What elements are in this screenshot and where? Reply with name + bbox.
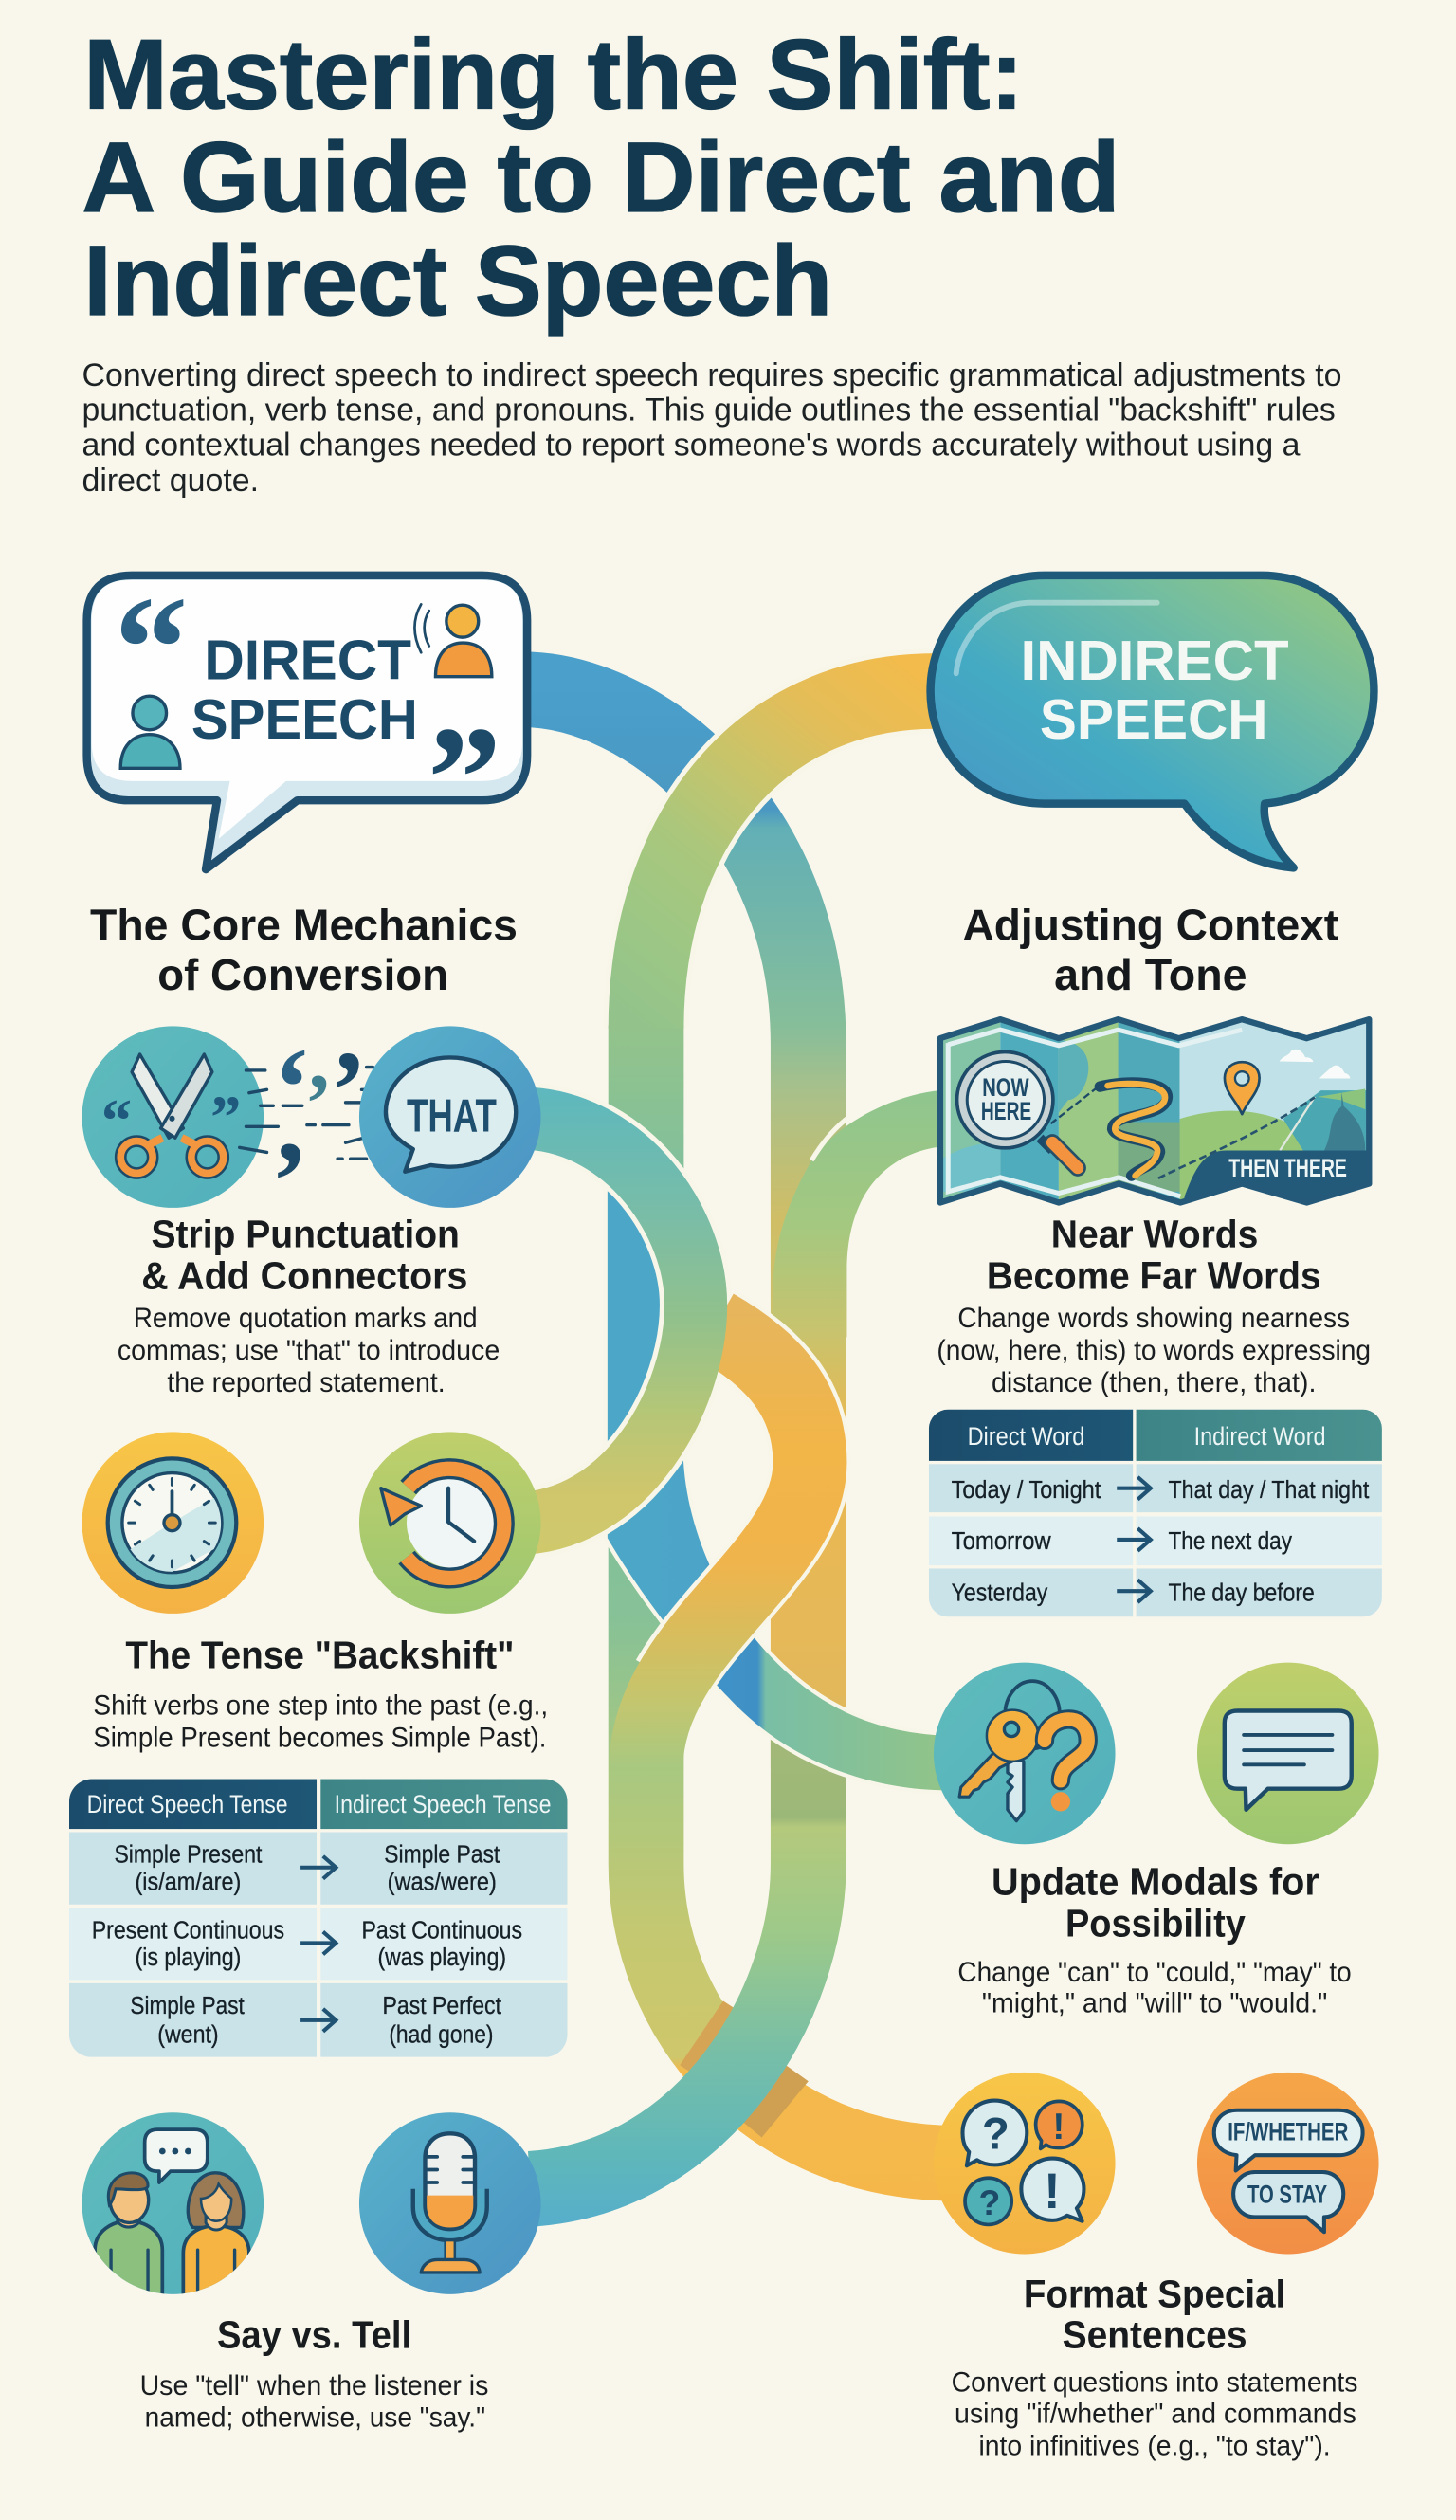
indirect label: SPEECH <box>1040 687 1268 751</box>
indirect label: INDIRECT <box>1021 629 1289 692</box>
section: strip punctuation: commas; use "that" to introduce <box>118 1335 500 1366</box>
table: tense changes: (is playing) <box>135 1943 241 1971</box>
heading: core mechanics: of Conversion <box>157 950 448 999</box>
section: strip punctuation: the reported statement. <box>167 1367 446 1398</box>
ribbon: keys circle to left lane <box>608 1181 948 1790</box>
table: tense changes: Simple Past <box>384 1840 500 1869</box>
section: tense backshift: The Tense "Backshift" <box>125 1634 515 1677</box>
table: direct and indirect words: The day before <box>1168 1578 1315 1606</box>
section: update modals: Update Modals for <box>992 1860 1320 1904</box>
icon: questions and exclamations <box>934 2073 1116 2254</box>
icon: flying punctuation: , <box>277 1060 304 1185</box>
table: direct and indirect words: Direct Word <box>968 1422 1084 1451</box>
ribbon: that circle to backshift circle <box>515 1119 696 1524</box>
direct speech bubble <box>87 566 527 869</box>
table: tense changes: (went) <box>157 2020 219 2049</box>
section: say vs tell <box>140 2313 488 2434</box>
indirect speech bubble <box>931 575 1374 867</box>
ribbon: direct bubble to right lane <box>522 689 809 1768</box>
map illustration: THEN THERE <box>1228 1154 1347 1182</box>
section: format special sentences: Format Special <box>1024 2272 1285 2315</box>
table: tense changes: Indirect Speech Tense <box>335 1790 552 1818</box>
icon: scissors cutting quotes <box>82 1026 264 1208</box>
section: strip punctuation: Remove quotation marks and <box>134 1303 478 1334</box>
section: format special sentences <box>952 2272 1357 2461</box>
section: near words: Near Words <box>1051 1212 1258 1255</box>
section: update modals: "might," and "will" to "would." <box>982 1987 1327 2018</box>
section: say vs tell: named; otherwise, use "say." <box>145 2402 485 2434</box>
icon: that bubble circle <box>359 1026 541 1208</box>
icon: orange speaker <box>414 604 492 677</box>
title: Indirect Speech <box>83 226 832 337</box>
ribbon: indirect bubble to left lane <box>646 691 956 2164</box>
table: tense changes <box>69 1780 568 2057</box>
section: near words: Change words showing nearness <box>957 1303 1350 1334</box>
intro paragraph <box>82 357 1342 499</box>
map route <box>1100 1083 1167 1176</box>
table: direct and indirect words: The next day <box>1168 1526 1293 1555</box>
intro paragraph: punctuation, verb tense, and pronouns. This guide outlines the essential "backshift" rules <box>82 392 1336 428</box>
table: direct and indirect words: That day / That night <box>1168 1475 1370 1504</box>
icon: closing quote: ” <box>428 696 501 860</box>
table: direct and indirect words: Tomorrow <box>952 1526 1052 1555</box>
icon: if/whether and to stay bubbles: TO STAY <box>1247 2179 1327 2208</box>
title: Mastering the Shift: <box>83 19 1024 130</box>
section: say vs tell: Say vs. Tell <box>217 2313 411 2357</box>
section: format special sentences: into infinitives (e.g., "to stay"). <box>978 2430 1331 2461</box>
intro paragraph: direct quote. <box>82 463 259 499</box>
title: A Guide to Direct and <box>82 122 1120 233</box>
ribbon: map to right lane <box>773 1089 948 1337</box>
table: tense changes: (is/am/are) <box>135 1867 241 1895</box>
direct label: DIRECT <box>204 628 411 691</box>
table: direct and indirect words: Today / Tonight <box>952 1475 1101 1504</box>
map illustration: HERE <box>981 1097 1031 1125</box>
section: tense backshift <box>93 1634 548 1754</box>
woven ribbons connecting the sections <box>515 689 956 2189</box>
icon: two people talking <box>82 2112 264 2298</box>
icon: if/whether and to stay bubbles <box>1197 2073 1379 2254</box>
icon: questions and exclamations: ? <box>982 2109 1010 2159</box>
section: strip punctuation: Strip Punctuation <box>151 1212 460 1255</box>
icon: clock <box>82 1432 264 1614</box>
section: update modals <box>957 1860 1352 2018</box>
table: tense changes: Past Perfect <box>383 1991 502 2019</box>
heading: core mechanics <box>90 901 518 999</box>
section: tense backshift: Shift verbs one step into the past (e.g., <box>93 1690 548 1722</box>
table: tense changes: Direct Speech Tense <box>87 1790 288 1818</box>
crossing shadow bands <box>680 2000 755 2083</box>
icon: questions and exclamations: ! <box>1044 2164 1061 2219</box>
icon: opening quote: “ <box>114 566 188 730</box>
icon: questions and exclamations: ? <box>978 2182 1000 2222</box>
table: tense changes: (was playing) <box>377 1943 506 1971</box>
arrows <box>1117 1477 1151 1602</box>
intro paragraph: Converting direct speech to indirect speech requires specific grammatical adjustments to <box>82 357 1342 393</box>
section: strip punctuation: & Add Connectors <box>141 1254 467 1298</box>
section: update modals: Change "can" to "could," "may" to <box>957 1957 1352 1988</box>
icon: microphone <box>359 2112 541 2294</box>
icon: flying punctuation: ’ <box>330 1028 367 1153</box>
section: near words <box>937 1212 1371 1398</box>
intro paragraph: and contextual changes needed to report someone's words accurately without using a <box>82 428 1301 464</box>
section: update modals: Possibility <box>1065 1902 1246 1945</box>
section: say vs tell: Use "tell" when the listener is <box>140 2370 488 2401</box>
icon: flying punctuation <box>240 1014 376 1185</box>
icon: that bubble circle: THAT <box>407 1090 497 1141</box>
heading: context and tone: and Tone <box>1054 950 1247 999</box>
table: tense changes: (had gone) <box>389 2020 494 2049</box>
icon: questions and exclamations: ! <box>1052 2107 1065 2147</box>
section: near words: (now, here, this) to words expressing <box>937 1335 1371 1366</box>
icon: if/whether and to stay bubbles: IF/WHETHER <box>1228 2116 1349 2146</box>
ribbon: orange S-curve <box>646 1326 810 1768</box>
icon: keys and question mark <box>934 1663 1116 1844</box>
indirect label <box>1021 629 1289 751</box>
arrows <box>300 1856 336 2032</box>
ribbon: that circle to backshift circle, outline <box>515 1119 696 1524</box>
section: format special sentences: using "if/whether" and commands <box>955 2398 1356 2429</box>
section: format special sentences: Sentences <box>1063 2313 1247 2357</box>
section: strip punctuation <box>118 1212 500 1398</box>
title <box>82 19 1120 337</box>
table: direct and indirect words: Yesterday <box>952 1578 1048 1606</box>
heading: context and tone <box>962 901 1338 999</box>
table: tense changes: Simple Past <box>130 1991 245 2019</box>
icon: flying punctuation: , <box>309 1014 330 1107</box>
icon: chat bubble <box>1197 1663 1379 1844</box>
table: direct and indirect words: Indirect Word <box>1194 1422 1326 1451</box>
heading: context and tone: Adjusting Context <box>962 901 1338 950</box>
icon: scissors cutting quotes: “ <box>101 1087 132 1155</box>
direct label: SPEECH <box>191 687 418 751</box>
table: tense changes: (was/were) <box>388 1867 497 1895</box>
section: format special sentences: Convert questions into statements <box>952 2366 1357 2398</box>
map illustration: NOW <box>982 1073 1029 1102</box>
ribbon: right lane to microphone <box>530 1727 809 2189</box>
table: direct and indirect words <box>929 1410 1382 1616</box>
table: tense changes: Past Continuous <box>362 1915 522 1944</box>
table: tense changes: Present Continuous <box>92 1915 284 1944</box>
direct label <box>191 628 418 751</box>
map illustration <box>940 1017 1370 1208</box>
section: near words: distance (then, there, that). <box>992 1367 1316 1398</box>
magnifier <box>1040 1138 1052 1150</box>
table: tense changes: Simple Present <box>114 1840 263 1869</box>
icon: scissors cutting quotes: ” <box>210 1084 241 1151</box>
heading: core mechanics: The Core Mechanics <box>90 901 518 950</box>
icon: flying punctuation: ‘ <box>273 1025 311 1150</box>
section: tense backshift: Simple Present becomes Simple Past). <box>93 1723 546 1754</box>
section: near words: Become Far Words <box>987 1254 1321 1298</box>
icon: teal listener <box>120 696 180 768</box>
icon: backward clock <box>359 1432 541 1614</box>
map pin <box>1225 1062 1260 1114</box>
